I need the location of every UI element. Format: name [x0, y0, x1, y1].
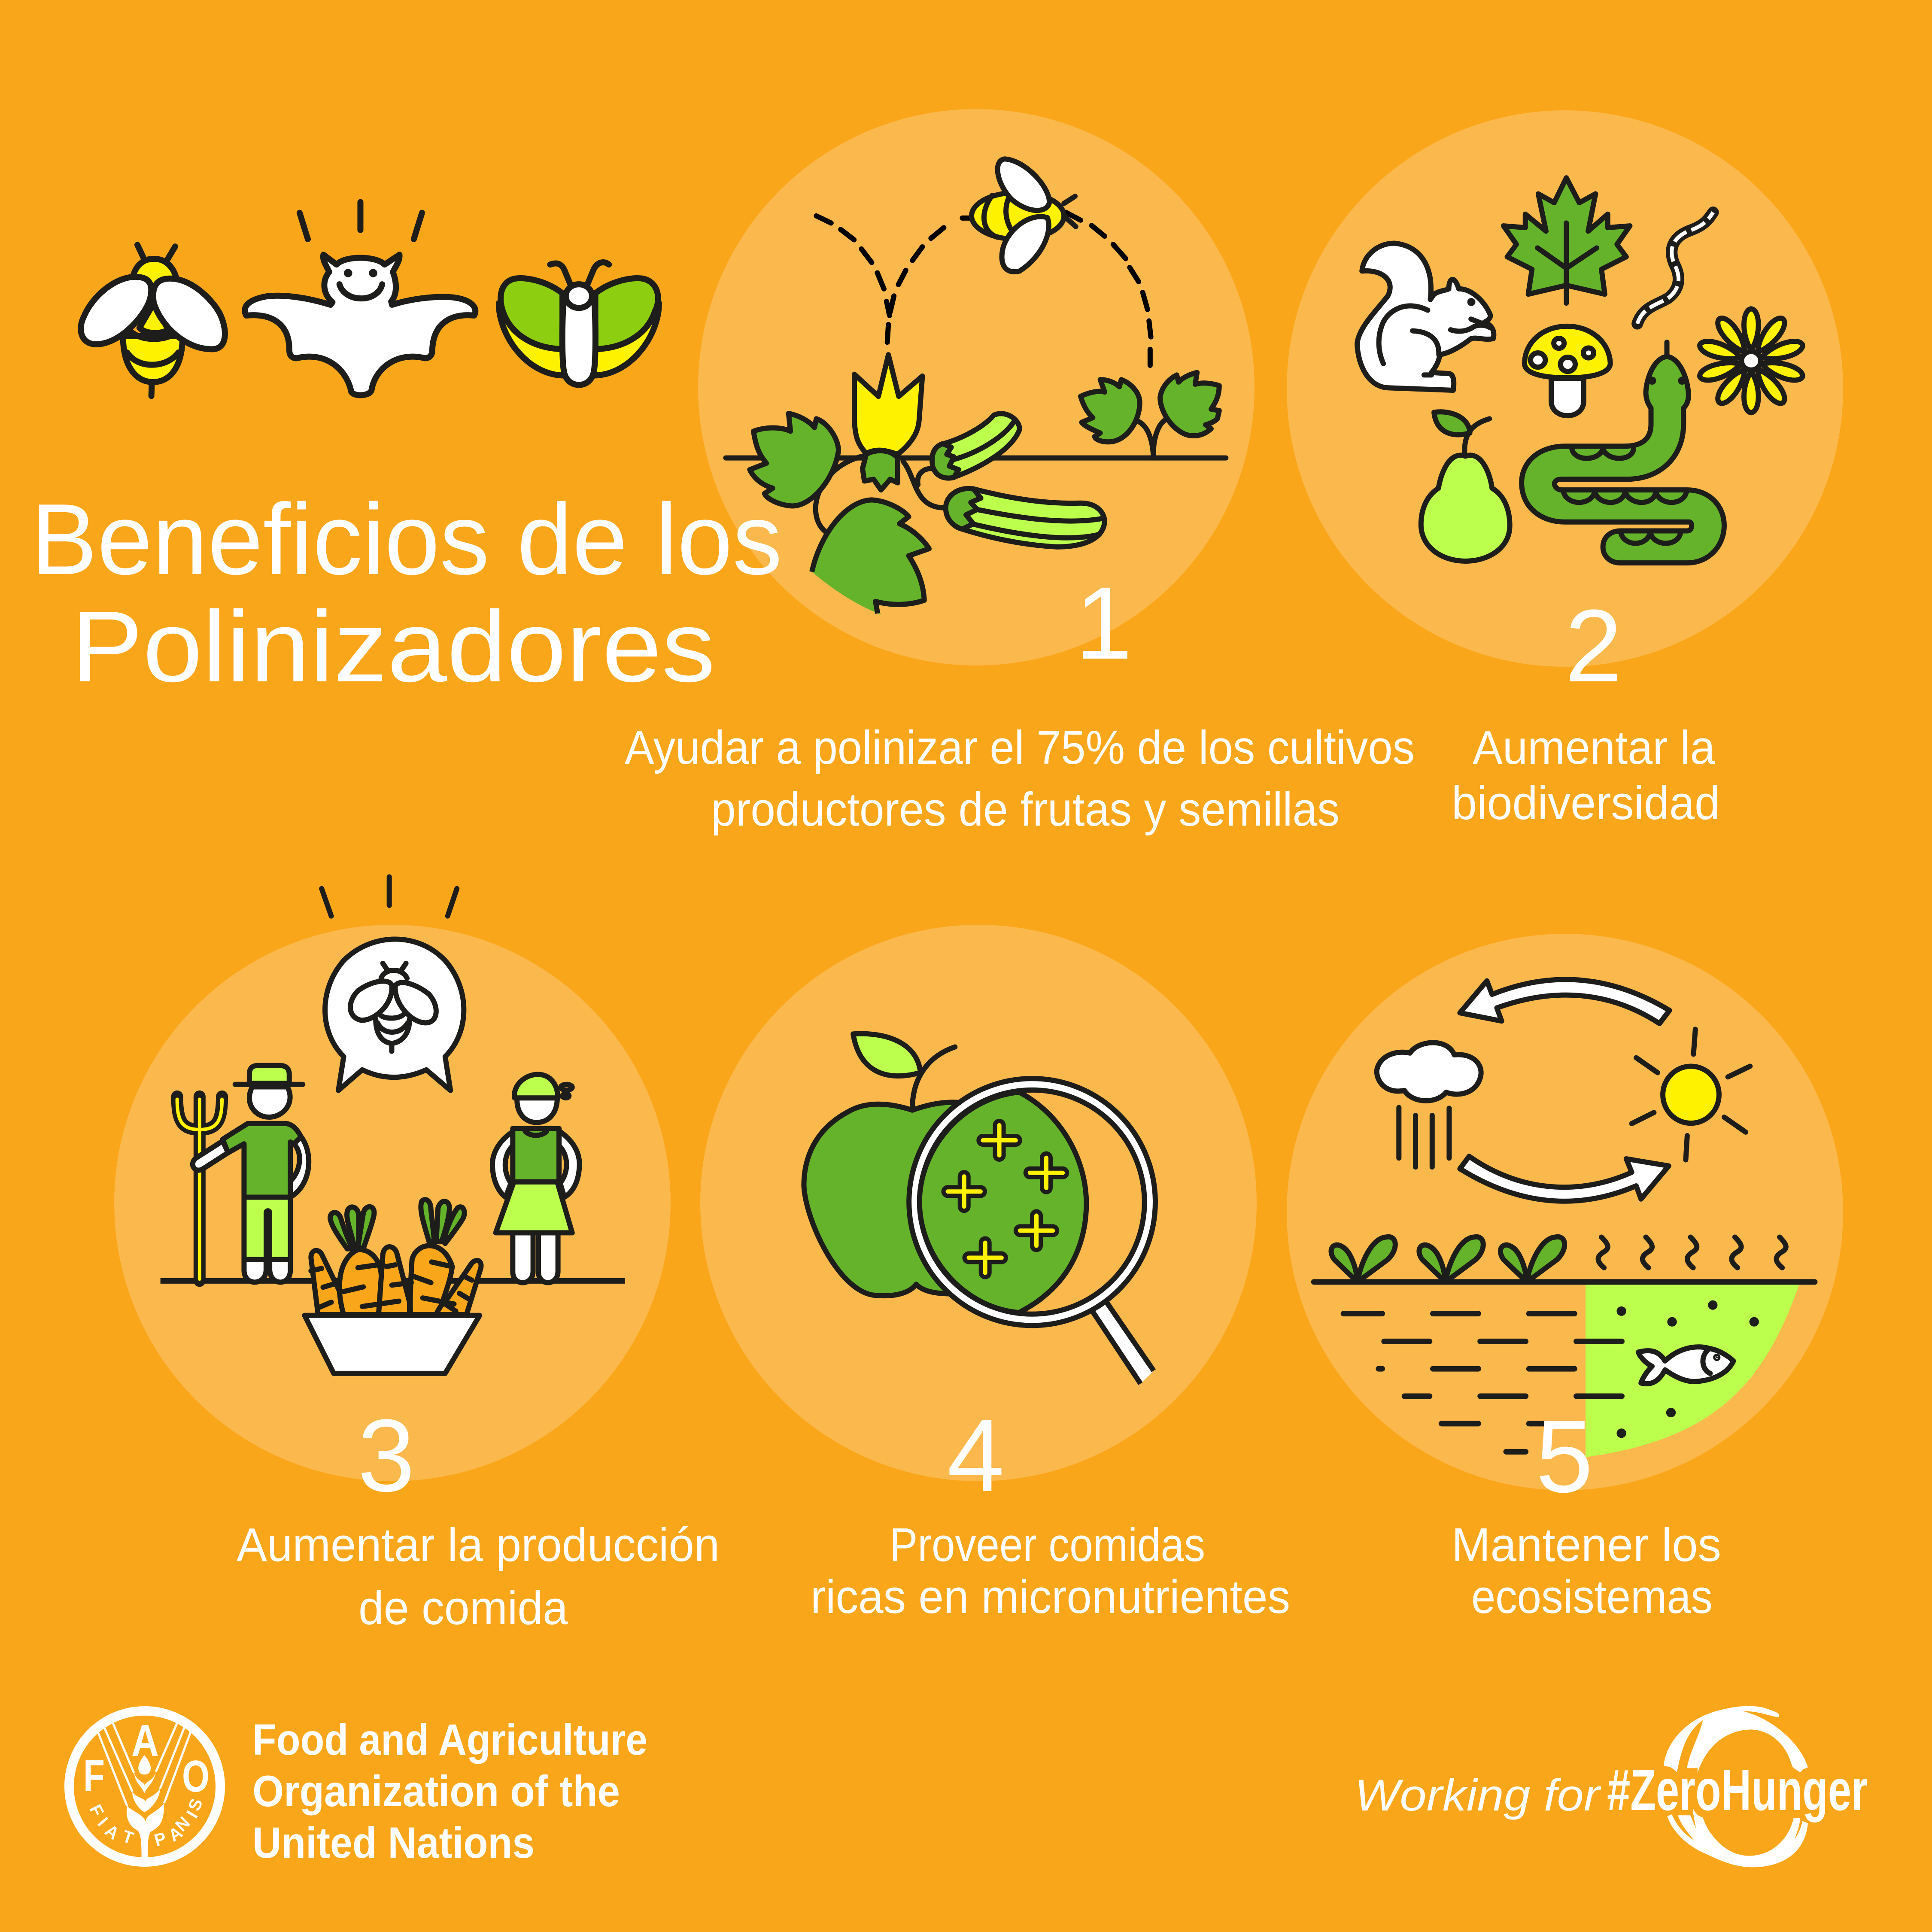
number 5: 5	[1536, 1399, 1593, 1514]
number 3: 3	[358, 1398, 415, 1513]
icon: squirrel	[1357, 243, 1494, 390]
logo letters FAO: F	[83, 1751, 105, 1801]
logo letters FAO: A	[131, 1716, 159, 1766]
caption 4	[811, 1519, 1290, 1623]
illustration: farmers, speech bubble and carrots	[161, 877, 625, 1373]
icon: woman	[492, 1075, 580, 1282]
logo motto FIAT PANIS: I	[94, 1814, 111, 1830]
icon: apple	[804, 1034, 981, 1296]
title	[31, 483, 782, 703]
organization name: United Nations	[252, 1818, 535, 1867]
caption 3: de comida	[358, 1582, 568, 1634]
organization name: Organization of the	[252, 1767, 620, 1816]
ground line	[161, 1278, 625, 1284]
brush ring	[1664, 1706, 1808, 1867]
circle background 2	[1287, 110, 1843, 667]
logo motto FIAT PANIS: F	[85, 1801, 107, 1820]
wheat ear	[98, 1723, 191, 1858]
icon: sun	[1632, 1029, 1750, 1160]
soil dashes	[1343, 1314, 1622, 1452]
number 2: 2	[1565, 588, 1622, 703]
arrow: bottom, towards sun	[1460, 1156, 1669, 1201]
caption 1: Ayudar a polinizar el 75% de los cultivos	[625, 721, 1415, 774]
icon: yellow flower	[1698, 309, 1805, 413]
arrow: top, towards cloud	[1460, 979, 1670, 1024]
illustration: bee, flower, zucchini and leaves	[726, 159, 1226, 614]
icon: bowl of carrots	[304, 1200, 481, 1373]
illustration: apple under magnifying glass	[804, 1034, 1155, 1384]
logo letters FAO	[83, 1716, 210, 1801]
circle background 3	[114, 925, 671, 1481]
icon: bat with rays	[245, 202, 475, 395]
logo motto FIAT PANIS: P	[152, 1829, 168, 1850]
logo motto FIAT PANIS: N	[172, 1813, 194, 1835]
caption 2: Aumentar la	[1473, 721, 1716, 774]
logo letters FAO: O	[182, 1752, 210, 1801]
caption 1	[625, 721, 1415, 836]
icon: snake	[1522, 342, 1724, 563]
illustration: squirrel, leaf, worm, mushroom, flower, pear, snake	[1357, 178, 1805, 563]
circle background 1	[698, 109, 1255, 665]
icon: nutrient plus signs	[948, 1125, 1063, 1273]
slogan	[1355, 1757, 1868, 1823]
icon: butterfly	[499, 262, 659, 385]
caption 5: ecosistemas	[1471, 1571, 1713, 1623]
Zero Hunger logo	[1355, 1706, 1868, 1867]
icon: pear	[1421, 412, 1510, 561]
caption 3: Aumentar la producción	[237, 1519, 720, 1571]
caption 5	[1452, 1519, 1721, 1623]
steam	[1598, 1237, 1786, 1268]
organization name	[252, 1715, 647, 1867]
water area	[1586, 1283, 1800, 1457]
caption 4: ricas en micronutrientes	[811, 1571, 1290, 1623]
logo motto FIAT PANIS: T	[120, 1827, 136, 1848]
logo motto FIAT PANIS: I	[183, 1807, 202, 1821]
illustration: water cycle, soil and fish	[1314, 979, 1815, 1457]
FAO logo	[69, 1711, 220, 1862]
logo motto FIAT PANIS: S	[185, 1796, 207, 1814]
caption 3	[237, 1519, 720, 1634]
icon: rays and speech bubble with bee	[322, 877, 464, 1091]
sprouts	[1331, 1237, 1564, 1282]
icon: worm	[1637, 213, 1713, 324]
icon: magnifying glass	[909, 1078, 1155, 1384]
logo motto FIAT PANIS	[85, 1796, 207, 1850]
circle background 5	[1287, 934, 1843, 1490]
caption 2	[1452, 721, 1720, 829]
organization name: Food and Agriculture	[252, 1715, 647, 1764]
circle background 4	[700, 925, 1257, 1481]
icon: bee	[81, 245, 225, 396]
panel 5: ecosystems	[1287, 934, 1843, 1623]
icon: fish	[1638, 1347, 1734, 1384]
caption 1: productores de frutas y semillas	[711, 783, 1340, 836]
caption 5: Mantener los	[1452, 1519, 1721, 1571]
title: Polinizadores	[71, 590, 715, 703]
title: Beneficios de los	[31, 483, 782, 595]
panel 3: food production	[114, 877, 720, 1634]
logo motto FIAT PANIS: A	[165, 1823, 186, 1845]
logo ring	[69, 1711, 220, 1862]
caption 2: biodiversidad	[1452, 777, 1720, 829]
panel 2: biodiversity	[1287, 110, 1843, 829]
icon: rain cloud	[1377, 1042, 1481, 1167]
icon: farmer with pitchfork	[177, 1066, 309, 1282]
slogan: Working for	[1355, 1771, 1602, 1820]
ground line	[1314, 1279, 1815, 1285]
icon: mushroom	[1525, 326, 1610, 416]
number 4: 4	[947, 1398, 1004, 1513]
panel 4: micronutrients	[700, 925, 1290, 1623]
logo motto FIAT PANIS: A	[101, 1821, 122, 1844]
icons: three pollinators	[81, 202, 659, 396]
caption 4: Proveer comidas	[890, 1519, 1205, 1571]
icon: maple leaf	[1504, 178, 1630, 303]
panel 1: pollinate crops	[625, 109, 1415, 836]
water dots	[1619, 1303, 1756, 1435]
number 1: 1	[1075, 565, 1132, 680]
